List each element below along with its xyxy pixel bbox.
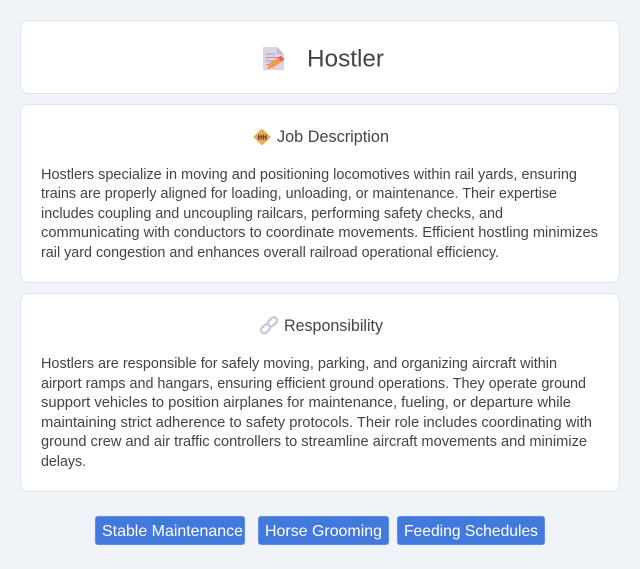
text block: responsibility: delays.: [41, 454, 86, 470]
title: Hostler: [307, 46, 384, 72]
text block: job description: trains are properly aligned for loading, unloading, or maintenance. Their expertise: [41, 186, 557, 202]
text block: responsibility: Hostlers are responsible for safely moving, parking, and organizing aircraft within: [41, 356, 557, 372]
icon: link: [260, 316, 278, 335]
tag: horse grooming: [258, 516, 389, 545]
panel: job description: [20, 104, 620, 282]
tag: feeding schedules: [397, 516, 545, 545]
text block: responsibility: support vehicles to position airplanes for maintenance, fueling, or departure while: [41, 395, 571, 411]
heading: responsibility: Responsibility: [284, 317, 384, 335]
text block: job description: [41, 167, 598, 261]
text block: job description: Hostlers specialize in moving and positioning locomotives within rail yards, ensuring: [41, 167, 577, 183]
text block: responsibility: airport ramps and hangars, ensuring efficient ground operations. They operate ground: [41, 376, 586, 392]
icon: memo with pencil: [263, 47, 284, 70]
tag: horse grooming: Horse Grooming: [265, 523, 382, 540]
heading: job description: Job Description: [277, 128, 389, 146]
tag: stable maintenance: [95, 516, 245, 545]
text block: job description: rail yard congestion and enhances overall railroad operational efficiency.: [41, 245, 499, 261]
text block: responsibility: ground crew and air traffic controllers to streamline aircraft movements and minimize: [41, 434, 587, 450]
icon: railway diamond sign: [254, 130, 270, 144]
text block: responsibility: maintaining strict adherence to safety protocols. Their role includes coordinating with: [41, 415, 592, 431]
panel: header: [20, 20, 620, 94]
text block: responsibility: [41, 356, 592, 470]
panel: responsibility: [20, 294, 620, 492]
tag: feeding schedules: Feeding Schedules: [404, 523, 538, 540]
tag: stable maintenance: Stable Maintenance: [102, 523, 243, 540]
text block: job description: includes coupling and uncoupling railcars, performing safety checks, and: [41, 206, 503, 222]
text block: job description: communicating with conductors to coordinate movements. Efficient hostling minimizes: [41, 225, 598, 241]
